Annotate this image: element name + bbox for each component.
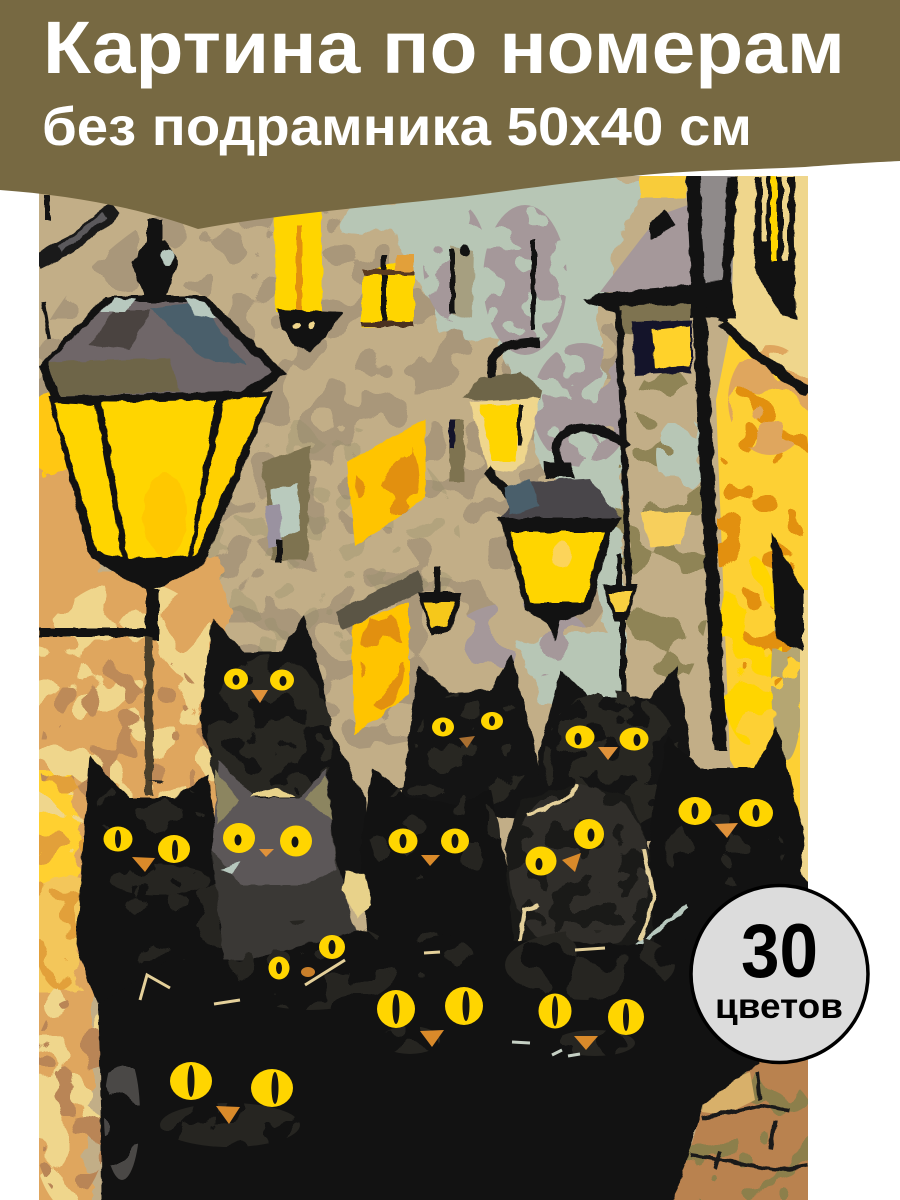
front street lantern — [497, 428, 628, 642]
badge: 30 colours — [691, 886, 868, 1062]
badge label: цветов — [715, 987, 843, 1026]
branches at upper left — [36, 194, 115, 340]
lit orange wall at left — [20, 400, 225, 1200]
big street lantern — [39, 218, 287, 796]
right yellow building wall — [716, 176, 813, 900]
window: large lit centre — [347, 418, 426, 546]
window: upper left lit — [274, 210, 344, 352]
subheading: без подрамника 50х40 см — [42, 97, 752, 157]
cat: bottom left — [170, 1062, 293, 1124]
cat: bottom centre — [377, 987, 483, 1047]
cat: grey — [212, 761, 372, 970]
pale green sky — [345, 176, 650, 700]
window: lower lit centre — [335, 570, 424, 734]
wall trim and upper window at right — [640, 176, 808, 650]
window: grey shuttered — [262, 446, 310, 562]
cat: small — [268, 935, 345, 980]
tower with lamp post — [583, 176, 738, 750]
window: upper middle dark — [450, 244, 474, 318]
cat: top centre — [400, 654, 545, 820]
cat: far right — [648, 726, 808, 943]
window: upper middle lit — [362, 255, 414, 328]
lit wall mottling — [15, 580, 245, 1200]
lower dark mass of cats — [98, 920, 760, 1200]
medium street lantern — [462, 342, 542, 495]
window: dark slit — [450, 240, 536, 482]
title banner — [0, 0, 900, 229]
heading: Картина по номерам — [43, 6, 845, 89]
badge number: 30 — [741, 909, 818, 994]
building windows — [262, 210, 536, 734]
cat: top right — [538, 666, 690, 840]
grey-violet wall patches — [423, 205, 621, 676]
brick pavement — [674, 1060, 808, 1200]
mottled stone walls — [39, 211, 618, 749]
cat: top left — [200, 615, 370, 900]
cat: mid centre — [364, 768, 514, 941]
cat: left — [76, 756, 224, 1004]
small far lanterns — [418, 555, 637, 700]
painting: black cats under street lanterns — [10, 170, 820, 1200]
cat: mid right — [505, 785, 687, 960]
cat: bottom right — [538, 994, 644, 1050]
